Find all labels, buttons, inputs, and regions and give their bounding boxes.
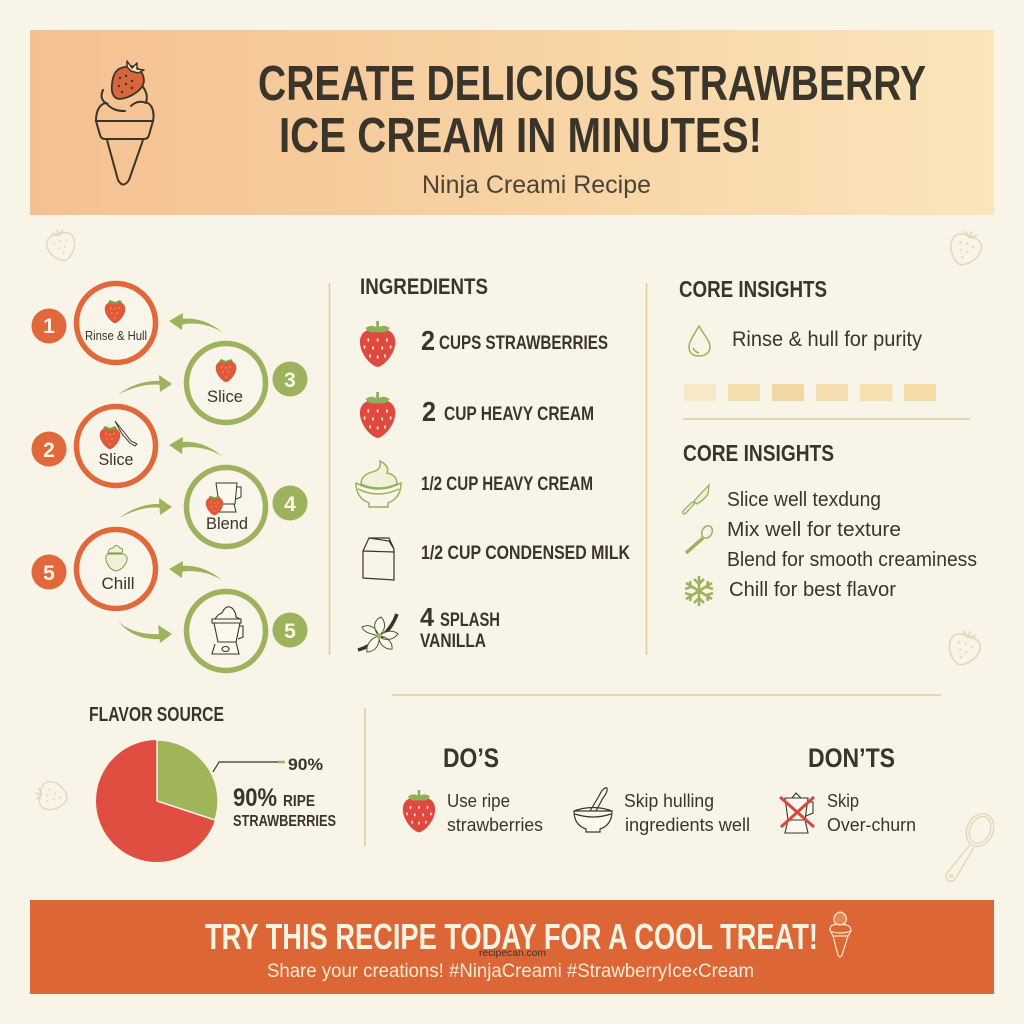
ingredient: vanilla: VANILLA bbox=[420, 631, 486, 652]
insight text: Rinse & hull for purity bbox=[732, 328, 922, 351]
step 3 slice: Slice bbox=[207, 387, 243, 406]
panel: process steps bbox=[32, 284, 308, 670]
step 4 blend: 4 bbox=[284, 493, 296, 516]
callout line bbox=[213, 762, 285, 772]
heading: dos: DO’S bbox=[443, 743, 499, 773]
source credit: recipecan.com bbox=[479, 947, 546, 959]
step 3 slice: 3 bbox=[284, 369, 296, 392]
step 1 rinse and hull: Rinse & Hull bbox=[85, 329, 147, 343]
pie label bbox=[233, 784, 336, 830]
decorative strawberries bbox=[33, 226, 986, 813]
insight list: Mix well for texture bbox=[727, 519, 901, 541]
panel: dos and donts bbox=[403, 743, 916, 835]
icon: spoon bbox=[686, 524, 715, 553]
heading: core insights: CORE INSIGHTS bbox=[679, 276, 827, 302]
step 3 slice bbox=[186, 344, 308, 422]
do: mix ingredients: Skip hulling bbox=[624, 790, 714, 811]
title bbox=[258, 57, 926, 163]
icon: ice cream cone with strawberry bbox=[96, 61, 154, 184]
step 2 slice with knife: Slice bbox=[98, 450, 134, 469]
icon: snowflake bbox=[685, 576, 713, 606]
do: mix ingredients bbox=[574, 788, 750, 835]
arrows between steps bbox=[119, 313, 222, 643]
ingredient: heavy cream: CUP HEAVY CREAM bbox=[444, 404, 594, 425]
ingredient: half cup heavy cream: 1/2 CUP HEAVY CREAM bbox=[421, 474, 593, 495]
title: ICE CREAM IN MINUTES! bbox=[279, 109, 762, 163]
step 5 chill: Chill bbox=[102, 574, 134, 593]
panel: ingredients bbox=[356, 274, 630, 652]
pie chart bbox=[96, 740, 218, 862]
ingredient: heavy cream bbox=[360, 392, 594, 438]
pie label: STRAWBERRIES bbox=[233, 813, 336, 830]
step 5 finished blender bbox=[186, 592, 308, 670]
callout value: 90% bbox=[288, 755, 323, 774]
do: mix ingredients: ingredients well bbox=[625, 814, 750, 835]
dividers bbox=[330, 283, 941, 846]
insight list: Chill for best flavor bbox=[729, 579, 896, 601]
step 4 blend bbox=[186, 468, 308, 546]
icon: footer ice cream bbox=[830, 912, 851, 957]
ingredient: condensed milk bbox=[363, 538, 630, 580]
step 5 chill bbox=[32, 530, 156, 608]
heading: flavor source: FLAVOR SOURCE bbox=[89, 704, 224, 726]
pie label: 90% bbox=[233, 784, 277, 812]
step 2 slice with knife bbox=[32, 406, 156, 486]
heading: donts: DON’TS bbox=[808, 743, 895, 773]
ingredient: half cup heavy cream bbox=[356, 461, 593, 507]
ingredient: vanilla bbox=[358, 602, 500, 652]
heading: core insights second: CORE INSIGHTS bbox=[683, 440, 834, 466]
ingredient: strawberries: CUPS STRAWBERRIES bbox=[439, 333, 608, 354]
ingredient: condensed milk: 1/2 CUP CONDENSED MILK bbox=[421, 543, 630, 564]
share line: Share your creations! #NinjaCreami #StrawberryIce‹Cream bbox=[267, 961, 754, 982]
step 2 slice with knife: 2 bbox=[43, 439, 55, 462]
panel: core insights top bbox=[679, 276, 970, 419]
do: ripe strawberries: Use ripe bbox=[447, 790, 510, 811]
icon: water drop bbox=[689, 326, 710, 356]
subtitle: Ninja Creami Recipe bbox=[422, 171, 651, 199]
insight list: Slice well texdung bbox=[727, 489, 881, 511]
dont: over-churn bbox=[780, 790, 916, 835]
do: ripe strawberries bbox=[403, 790, 543, 835]
panel: core insights bottom bbox=[683, 440, 977, 606]
do: ripe strawberries: strawberries bbox=[447, 814, 543, 835]
step 4 blend: Blend bbox=[206, 514, 248, 533]
insight list: Blend for smooth creaminess bbox=[727, 549, 977, 571]
step 1 rinse and hull: 1 bbox=[43, 315, 55, 338]
header banner bbox=[30, 30, 994, 215]
call to action: TRY THIS RECIPE TODAY FOR A COOL TREAT! bbox=[205, 916, 818, 957]
dont: over-churn: Over-churn bbox=[827, 814, 916, 835]
panel: flavor source bbox=[89, 704, 336, 862]
step 5 finished blender: 5 bbox=[284, 620, 296, 643]
step 5 chill: 5 bbox=[43, 562, 55, 585]
insight list bbox=[727, 489, 977, 601]
ingredient: vanilla: 4 bbox=[420, 602, 435, 632]
ingredient: strawberries: 2 bbox=[421, 325, 435, 356]
decorative spoon bbox=[946, 809, 999, 881]
step 1 rinse and hull bbox=[32, 284, 156, 362]
progress blocks bbox=[684, 384, 936, 401]
heading: ingredients: INGREDIENTS bbox=[360, 274, 488, 299]
icon: knife bbox=[683, 485, 709, 514]
ingredient: heavy cream: 2 bbox=[422, 396, 436, 427]
footer banner bbox=[30, 900, 994, 994]
pie label: RIPE bbox=[283, 793, 315, 810]
ingredient: strawberries bbox=[360, 321, 608, 367]
ingredient: vanilla: SPLASH bbox=[440, 610, 500, 631]
dont: over-churn: Skip bbox=[827, 790, 859, 811]
